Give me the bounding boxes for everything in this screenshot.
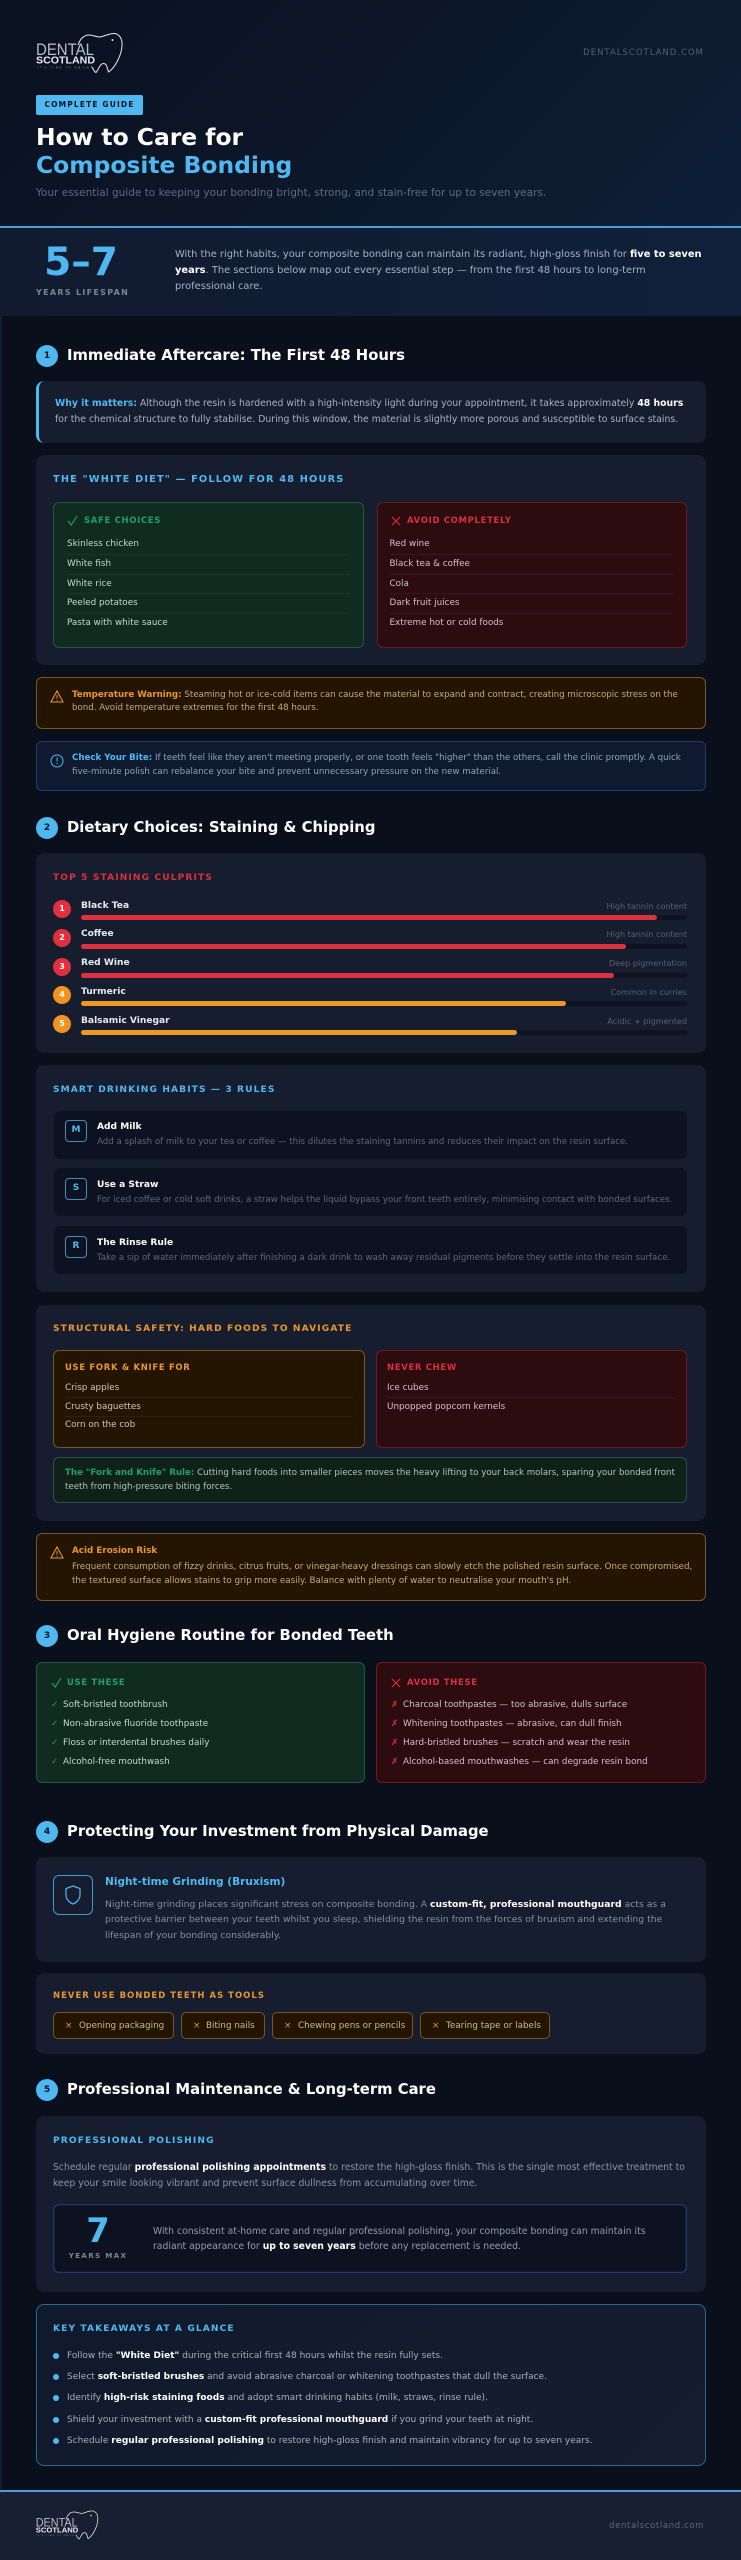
row: turmeric (53, 986, 687, 1006)
logo: IT'S TIME TO SMILE (37, 66, 89, 70)
heading: THE "WHITE DIET" — FOLLOW FOR 48 HOURS (53, 474, 344, 485)
icon: shield (53, 1875, 93, 1915)
panel: staining culprits (36, 853, 706, 1053)
panel: bruxism (36, 1857, 706, 1962)
chip: packaging (53, 2012, 174, 2039)
rule: add milk (54, 1111, 687, 1159)
chip: pens: × (284, 2020, 291, 2030)
card: avoid these: ✗ (391, 1719, 398, 1729)
row: balsamic vinegar: Balsamic Vinegar (81, 1016, 170, 1026)
section 4 heading: 4 (44, 1827, 50, 1837)
card: avoid these (376, 1662, 706, 1783)
card: avoid these: Hard-bristled brushes — scratch and wear the resin (403, 1738, 630, 1748)
row: red wine: 3 (59, 962, 65, 970)
temperature warning: Temperature Warning: Steaming hot or ice-cold items can cause the material to expand and contract, creating microscopic stress on the (72, 690, 678, 700)
rule: rinse (54, 1226, 687, 1274)
card: avoid these: AVOID THESE (407, 1677, 478, 1687)
fork and knife rule (53, 1457, 687, 1503)
card: use these: ✓ (51, 1719, 58, 1729)
rule: add milk: Add Milk (97, 1122, 142, 1132)
section 1 heading: 1 (44, 351, 50, 361)
section 3 heading: Oral Hygiene Routine for Bonded Teeth (67, 1627, 394, 1644)
card: avoid these: ✗ (391, 1757, 398, 1767)
row: coffee: 2 (59, 933, 65, 942)
title (36, 123, 292, 179)
panel: bruxism: Night-time grinding places significant stress on composite bonding. A custom-fit, professional mouthguard acts as a (105, 1898, 666, 1910)
logo (36, 33, 123, 73)
stat (68, 2211, 127, 2260)
icon: check (52, 1678, 62, 1688)
rule: use a straw (54, 1168, 687, 1216)
row: black tea: Black Tea (81, 900, 129, 910)
card: fork and knife: Crusty baguettes (65, 1402, 141, 1412)
why it matters panel (36, 381, 706, 443)
check your bite: five-minute polish can rebalance your bite and prevent unnecessary pressure on the new material. (72, 767, 501, 777)
stat: lifespan (36, 240, 129, 297)
card: use these: Non-abrasive fluoride toothpaste (63, 1719, 208, 1729)
fork and knife rule: The "Fork and Knife" Rule: Cutting hard foods into smaller pieces moves the heavy lifting to your back molars, sparing your bonded front (65, 1468, 675, 1478)
chip: nails: Biting nails (206, 2020, 255, 2030)
check your bite: Check Your Bite: If teeth feel like they aren't meeting properly, or one tooth feels "higher" than the others, call the clinic promptly. A quick (72, 753, 681, 763)
polishing text: Schedule regular professional polishing appointments to restore the high-gloss finish. This is the single most effective treatment to (53, 2162, 685, 2173)
rule: use a straw: S (73, 1182, 79, 1192)
section 2 heading: Dietary Choices: Staining & Chipping (67, 819, 375, 836)
card: never chew (376, 1350, 687, 1448)
stats band (0, 226, 741, 316)
row: red wine: Red Wine (81, 958, 130, 968)
heading: NEVER USE BONDED TEETH AS TOOLS (53, 1990, 265, 2000)
rule: use a straw: Use a Straw (97, 1180, 158, 1190)
panel: professional polishing (36, 2116, 706, 2292)
heading: PROFESSIONAL POLISHING (53, 2136, 215, 2146)
section 4 heading: Protecting Your Investment from Physical Damage (67, 1823, 489, 1840)
stat: lifespan: YEARS LIFESPAN (36, 288, 129, 297)
panel: bruxism: Night-time Grinding (Bruxism) (105, 1876, 285, 1888)
rule: use a straw: For iced coffee or cold soft drinks, a straw helps the liquid bypass your front teeth entirely, minimising contact with bonded surfaces. (97, 1194, 672, 1204)
fork and knife rule: teeth from high-pressure biting forces. (65, 1482, 232, 1492)
card: avoid these: ✗ (391, 1738, 398, 1748)
heading: TOP 5 STAINING CULPRITS (53, 873, 213, 883)
card: fork and knife: USE FORK & KNIFE FOR (65, 1362, 190, 1372)
row: balsamic vinegar: 5 (59, 1019, 65, 1028)
card: never chew: Unpopped popcorn kernels (387, 1402, 505, 1412)
acid erosion risk: the textured surface allows stains to grip more easily. Balance with plenty of water to neutralise your mouth's pH. (72, 1576, 571, 1586)
card: avoid completely: AVOID COMPLETELY (407, 515, 512, 525)
footer logo (36, 2510, 98, 2540)
takeaway 4: Shield your investment with a custom-fit professional mouthguard if you grind your teeth at night. (67, 2414, 533, 2424)
polishing text (53, 2162, 685, 2189)
intro text: professional care. (175, 281, 263, 292)
footer (0, 2490, 741, 2560)
row: coffee: High tannin content (606, 929, 687, 939)
card: use these: ✓ (51, 1738, 58, 1748)
card: avoid these: Charcoal toothpastes — too abrasive, dulls surface (403, 1700, 627, 1710)
heading: KEY TAKEAWAYS AT A GLANCE (53, 2324, 235, 2334)
intro text: With the right habits, your composite bonding can maintain its radiant, high-gloss finish for five to seven (175, 249, 702, 260)
section 5 heading: Professional Maintenance & Long-term Care (67, 2081, 436, 2098)
footer logo: IT'S TIME TO SMILE (36, 2535, 75, 2537)
icon: cross (392, 1678, 400, 1688)
card: avoid completely: Black tea & coffee (390, 559, 470, 569)
footer logo: SCOTLAND (36, 2526, 78, 2535)
card: safe choices: Pasta with white sauce (67, 618, 168, 628)
chip: pens: Chewing pens or pencils (298, 2020, 405, 2030)
rule: rinse: Take a sip of water immediately after finishing a dark drink to wash away residual pigments before they settle into the resin surface. (97, 1252, 670, 1262)
card: avoid these: Alcohol-based mouthwashes — can degrade resin bond (403, 1757, 648, 1767)
card: avoid completely: Cola (390, 579, 409, 589)
section 2 heading: 2 (44, 823, 50, 833)
panel: smart drinking (36, 1065, 706, 1292)
row: red wine (53, 958, 687, 978)
section 5 heading: 5 (44, 2085, 50, 2095)
badge: COMPLETE GUIDE (44, 100, 135, 109)
card: avoid these: ✗ (391, 1700, 398, 1710)
title: How to Care for (36, 123, 243, 151)
card: safe choices: White rice (67, 579, 112, 589)
heading: STRUCTURAL SAFETY: HARD FOODS TO NAVIGATE (53, 1324, 352, 1334)
footer logo: DENTAL (36, 2515, 78, 2529)
card: use these: USE THESE (67, 1677, 125, 1687)
rule: add milk: M (72, 1125, 80, 1135)
row: red wine: Deep pigmentation (609, 958, 687, 968)
callout: seven years: With consistent at-home care and regular professional polishing, your composite bonding can maintain its (153, 2226, 646, 2236)
panel: bruxism: protective barrier between your teeth whilst you sleep, shielding the resin from the forces of bruxism and extending the (105, 1914, 662, 1925)
row: coffee: Coffee (81, 929, 114, 939)
card: use these: ✓ (51, 1700, 58, 1710)
panel: structural safety (36, 1305, 706, 1521)
card: use these (36, 1662, 365, 1783)
stat: YEARS MAX (69, 2251, 127, 2260)
card: safe choices: Peeled potatoes (67, 598, 138, 608)
panel: bruxism: lifespan of your bonding considerably. (105, 1930, 281, 1940)
row: black tea: 1 (59, 904, 65, 913)
card: use these: ✓ (51, 1757, 58, 1767)
callout: seven years (53, 2204, 687, 2273)
chip: tape: × (432, 2020, 439, 2030)
card: fork and knife: Crisp apples (65, 1383, 119, 1393)
section 3 heading: 3 (44, 1631, 50, 1641)
row: turmeric: 4 (59, 990, 65, 999)
takeaway 3: Identify high-risk staining foods and adopt smart drinking habits (milk, straws, rinse rule). (67, 2393, 488, 2403)
subtitle: Your essential guide to keeping your bonding bright, strong, and stain-free for up to seven years. (36, 187, 546, 199)
why it matters panel: Why it matters: Although the resin is hardened with a high-intensity light during your appointment, it takes approximately 48 hours (55, 398, 683, 409)
stat: lifespan: 5–7 (44, 240, 118, 285)
row: balsamic vinegar: Acidic + pigmented (607, 1016, 687, 1026)
takeaway 2: Select soft-bristled brushes and avoid abrasive charcoal or whitening toothpastes that dull the surface. (67, 2372, 547, 2382)
card: never chew: Ice cubes (387, 1383, 429, 1393)
card: fork and knife (53, 1350, 365, 1448)
panel: never use teeth as tools (36, 1973, 706, 2054)
row: turmeric: Common in curries (610, 987, 687, 997)
row: turmeric: Turmeric (81, 987, 126, 997)
acid erosion risk (36, 1533, 706, 1601)
icon: warning (50, 690, 64, 702)
stat: 7 (86, 2211, 110, 2250)
temperature warning: bond. Avoid temperature extremes for the first 48 hours. (72, 703, 318, 713)
icon: check (68, 516, 78, 526)
card: never chew: NEVER CHEW (387, 1362, 457, 1372)
card: use these: Floss or interdental brushes daily (63, 1738, 209, 1748)
chip: nails: × (193, 2020, 200, 2030)
row: black tea (53, 900, 687, 920)
website: DENTALSCOTLAND.COM (583, 47, 704, 57)
chip: tape (420, 2012, 550, 2039)
takeaway 1: Follow the "White Diet" during the critical first 48 hours whilst the resin fully sets. (67, 2351, 443, 2361)
card: avoid completely (377, 502, 687, 648)
takeaway 5: Schedule regular professional polishing to restore high-gloss finish and maintain vibrancy for up to seven years. (67, 2436, 593, 2446)
chip: nails (181, 2012, 265, 2039)
card: use these: Soft-bristled toothbrush (63, 1700, 168, 1710)
callout: seven years: radiant appearance for up to seven years before any replacement is needed. (153, 2240, 521, 2252)
panel: key takeaways (36, 2304, 706, 2466)
icon: info (50, 754, 64, 768)
card: avoid completely: Red wine (390, 539, 430, 549)
card: safe choices: SAFE CHOICES (84, 515, 161, 525)
rule: rinse: The Rinse Rule (97, 1238, 173, 1248)
panel: white diet (36, 455, 706, 665)
card: use these: Alcohol-free mouthwash (63, 1757, 170, 1767)
why it matters panel: for the chemical structure to fully stabilise. During this window, the material is slightly more porous and susceptible to surface stains. (55, 414, 678, 425)
card: safe choices (53, 502, 364, 648)
heading: SMART DRINKING HABITS — 3 RULES (53, 1085, 276, 1095)
title: Composite Bonding (36, 151, 292, 179)
card: fork and knife: Corn on the cob (65, 1420, 135, 1430)
header (0, 0, 741, 226)
intro text: years. The sections below map out every essential step — from the first 48 hours to long-term (175, 265, 646, 276)
rule: rinse: R (73, 1240, 79, 1250)
temperature warning (36, 677, 706, 729)
chip: packaging: Opening packaging (79, 2020, 164, 2030)
card: avoid these: Whitening toothpastes — abrasive, can dull finish (403, 1719, 622, 1729)
logo: DENTAL (36, 40, 94, 59)
chip: tape: Tearing tape or labels (446, 2020, 541, 2030)
icon: cross (392, 516, 400, 526)
section 1 heading: Immediate Aftercare: The First 48 Hours (67, 347, 405, 364)
rule: add milk: Add a splash of milk to your tea or coffee — this dilutes the staining tannins and reduces their impact on the resin surface. (97, 1137, 628, 1147)
card: safe choices: White fish (67, 559, 111, 569)
acid erosion risk: Frequent consumption of fizzy drinks, citrus fruits, or vinegar-heavy dressings can slowly etch the polished resin surface. Once compromised, (72, 1562, 692, 1572)
chip: pens (272, 2012, 413, 2039)
logo: SCOTLAND (36, 56, 95, 66)
polishing text: keep your smile looking vibrant and prevent surface dullness from accumulating over time. (53, 2178, 477, 2189)
card: safe choices: Skinless chicken (67, 539, 139, 549)
chip: packaging: × (65, 2020, 72, 2030)
check your bite (36, 741, 706, 791)
row: coffee (53, 929, 687, 949)
row: black tea: High tannin content (606, 900, 687, 910)
acid erosion risk: Acid Erosion Risk (72, 1546, 157, 1556)
card: avoid completely: Dark fruit juices (390, 598, 459, 608)
row: balsamic vinegar (53, 1015, 687, 1035)
footer url: dentalscotland.com (609, 2520, 704, 2530)
intro text (175, 249, 702, 292)
icon: warning (50, 1546, 64, 1558)
card: avoid completely: Extreme hot or cold foods (390, 618, 503, 628)
badge (36, 95, 143, 115)
